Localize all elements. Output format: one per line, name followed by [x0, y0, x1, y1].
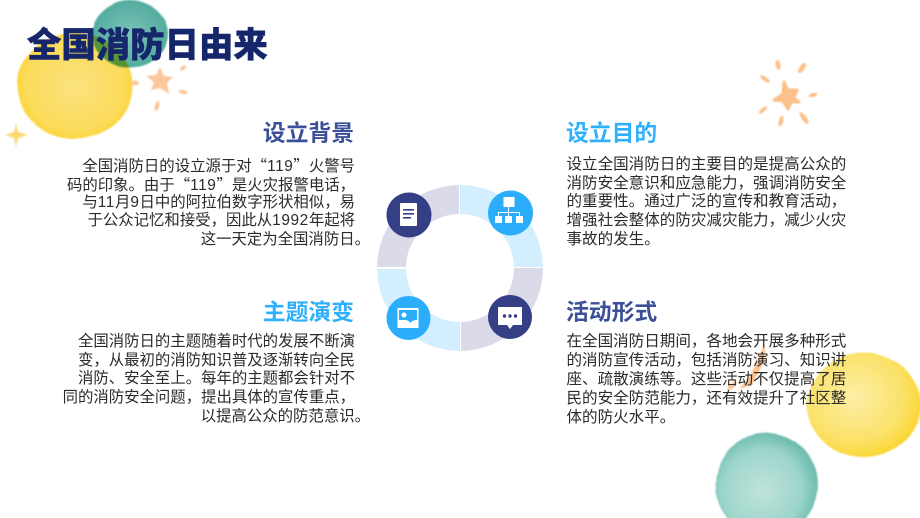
icon: document [386, 192, 432, 238]
text block: 活动形式: 座、疏散演练等。这些活动不仅提高了居 [566, 370, 846, 388]
icon: org chart [488, 190, 533, 236]
heading: 活动形式: 活动形式 [566, 298, 657, 324]
text block: 设立目的: 增强社会整体的防灾减灾能力，减少火灾 [566, 212, 846, 228]
icon: gold sparkle [5, 123, 28, 147]
ring segment: bottom right [461, 268, 543, 351]
text block: 主题演变: 以提高公众的防范意识。 [201, 408, 370, 424]
text block: 设立背景: 码的印象。由于“119”是火灾报警电话， [67, 172, 355, 194]
text block: 设立背景: 这一天定为全国消防日。 [201, 230, 370, 248]
text block: 主题演变: 消防、安全至上。每年的主题都会针对不 [78, 370, 355, 386]
heading: 设立目的: 设立目的 [566, 120, 657, 146]
text block: 主题演变: 同的消防安全问题，提出具体的宣传重点， [63, 388, 355, 406]
title: 全国消防日由来 [27, 26, 268, 64]
blob: yellow bottom right [807, 353, 920, 457]
text block: 设立背景: 与11月9日中的阿拉伯数字形状相似，易 [82, 194, 355, 210]
blob: yellow top left [17, 33, 133, 139]
text block: 设立目的: 的重要性。通过广泛的宣传和教育活动， [566, 192, 846, 210]
text block: 设立目的: 消防安全意识和应急能力，强调消防安全 [566, 174, 846, 192]
heading: 主题演变: 主题演变 [263, 298, 354, 324]
ring diagram with icons [377, 185, 543, 351]
text block: 主题演变: 全国消防日的主题随着时代的发展不断演 [78, 332, 355, 350]
text block: 活动形式: 的消防宣传活动，包括消防演习、知识讲 [566, 352, 846, 368]
ring segment: bottom left [377, 269, 460, 351]
icon: orange star top left [131, 64, 188, 111]
text block: 主题演变: 变，从最初的消防知识普及逐渐转向全民 [78, 352, 355, 368]
text block: 活动形式: 在全国消防日期间，各地会开展多种形式 [566, 332, 846, 350]
icon: chat bubble [488, 295, 532, 339]
text block: 活动形式: 体的防火水平。 [566, 408, 675, 426]
icon: picture [386, 296, 430, 340]
blob: teal bottom [716, 433, 818, 518]
text block: 活动形式: 民的安全防范能力，还有效提升了社区整 [566, 390, 846, 406]
text block: 设立背景: 于公众记忆和接受，因此从1992年起将 [87, 212, 355, 228]
heading: 设立背景: 设立背景 [263, 120, 354, 146]
icon: orange star top right [758, 60, 818, 127]
text block: 设立背景: 全国消防日的设立源于对“119”火警号 [82, 154, 355, 176]
icon: orange star behind text [726, 343, 765, 391]
text block: 设立目的: 设立全国消防日的主要目的是提高公众的 [566, 156, 846, 172]
blob: teal top left [92, 0, 168, 68]
text block: 设立目的: 事故的发生。 [566, 230, 660, 248]
ring segment: top left [377, 185, 459, 267]
ring segment: top right [460, 185, 543, 267]
